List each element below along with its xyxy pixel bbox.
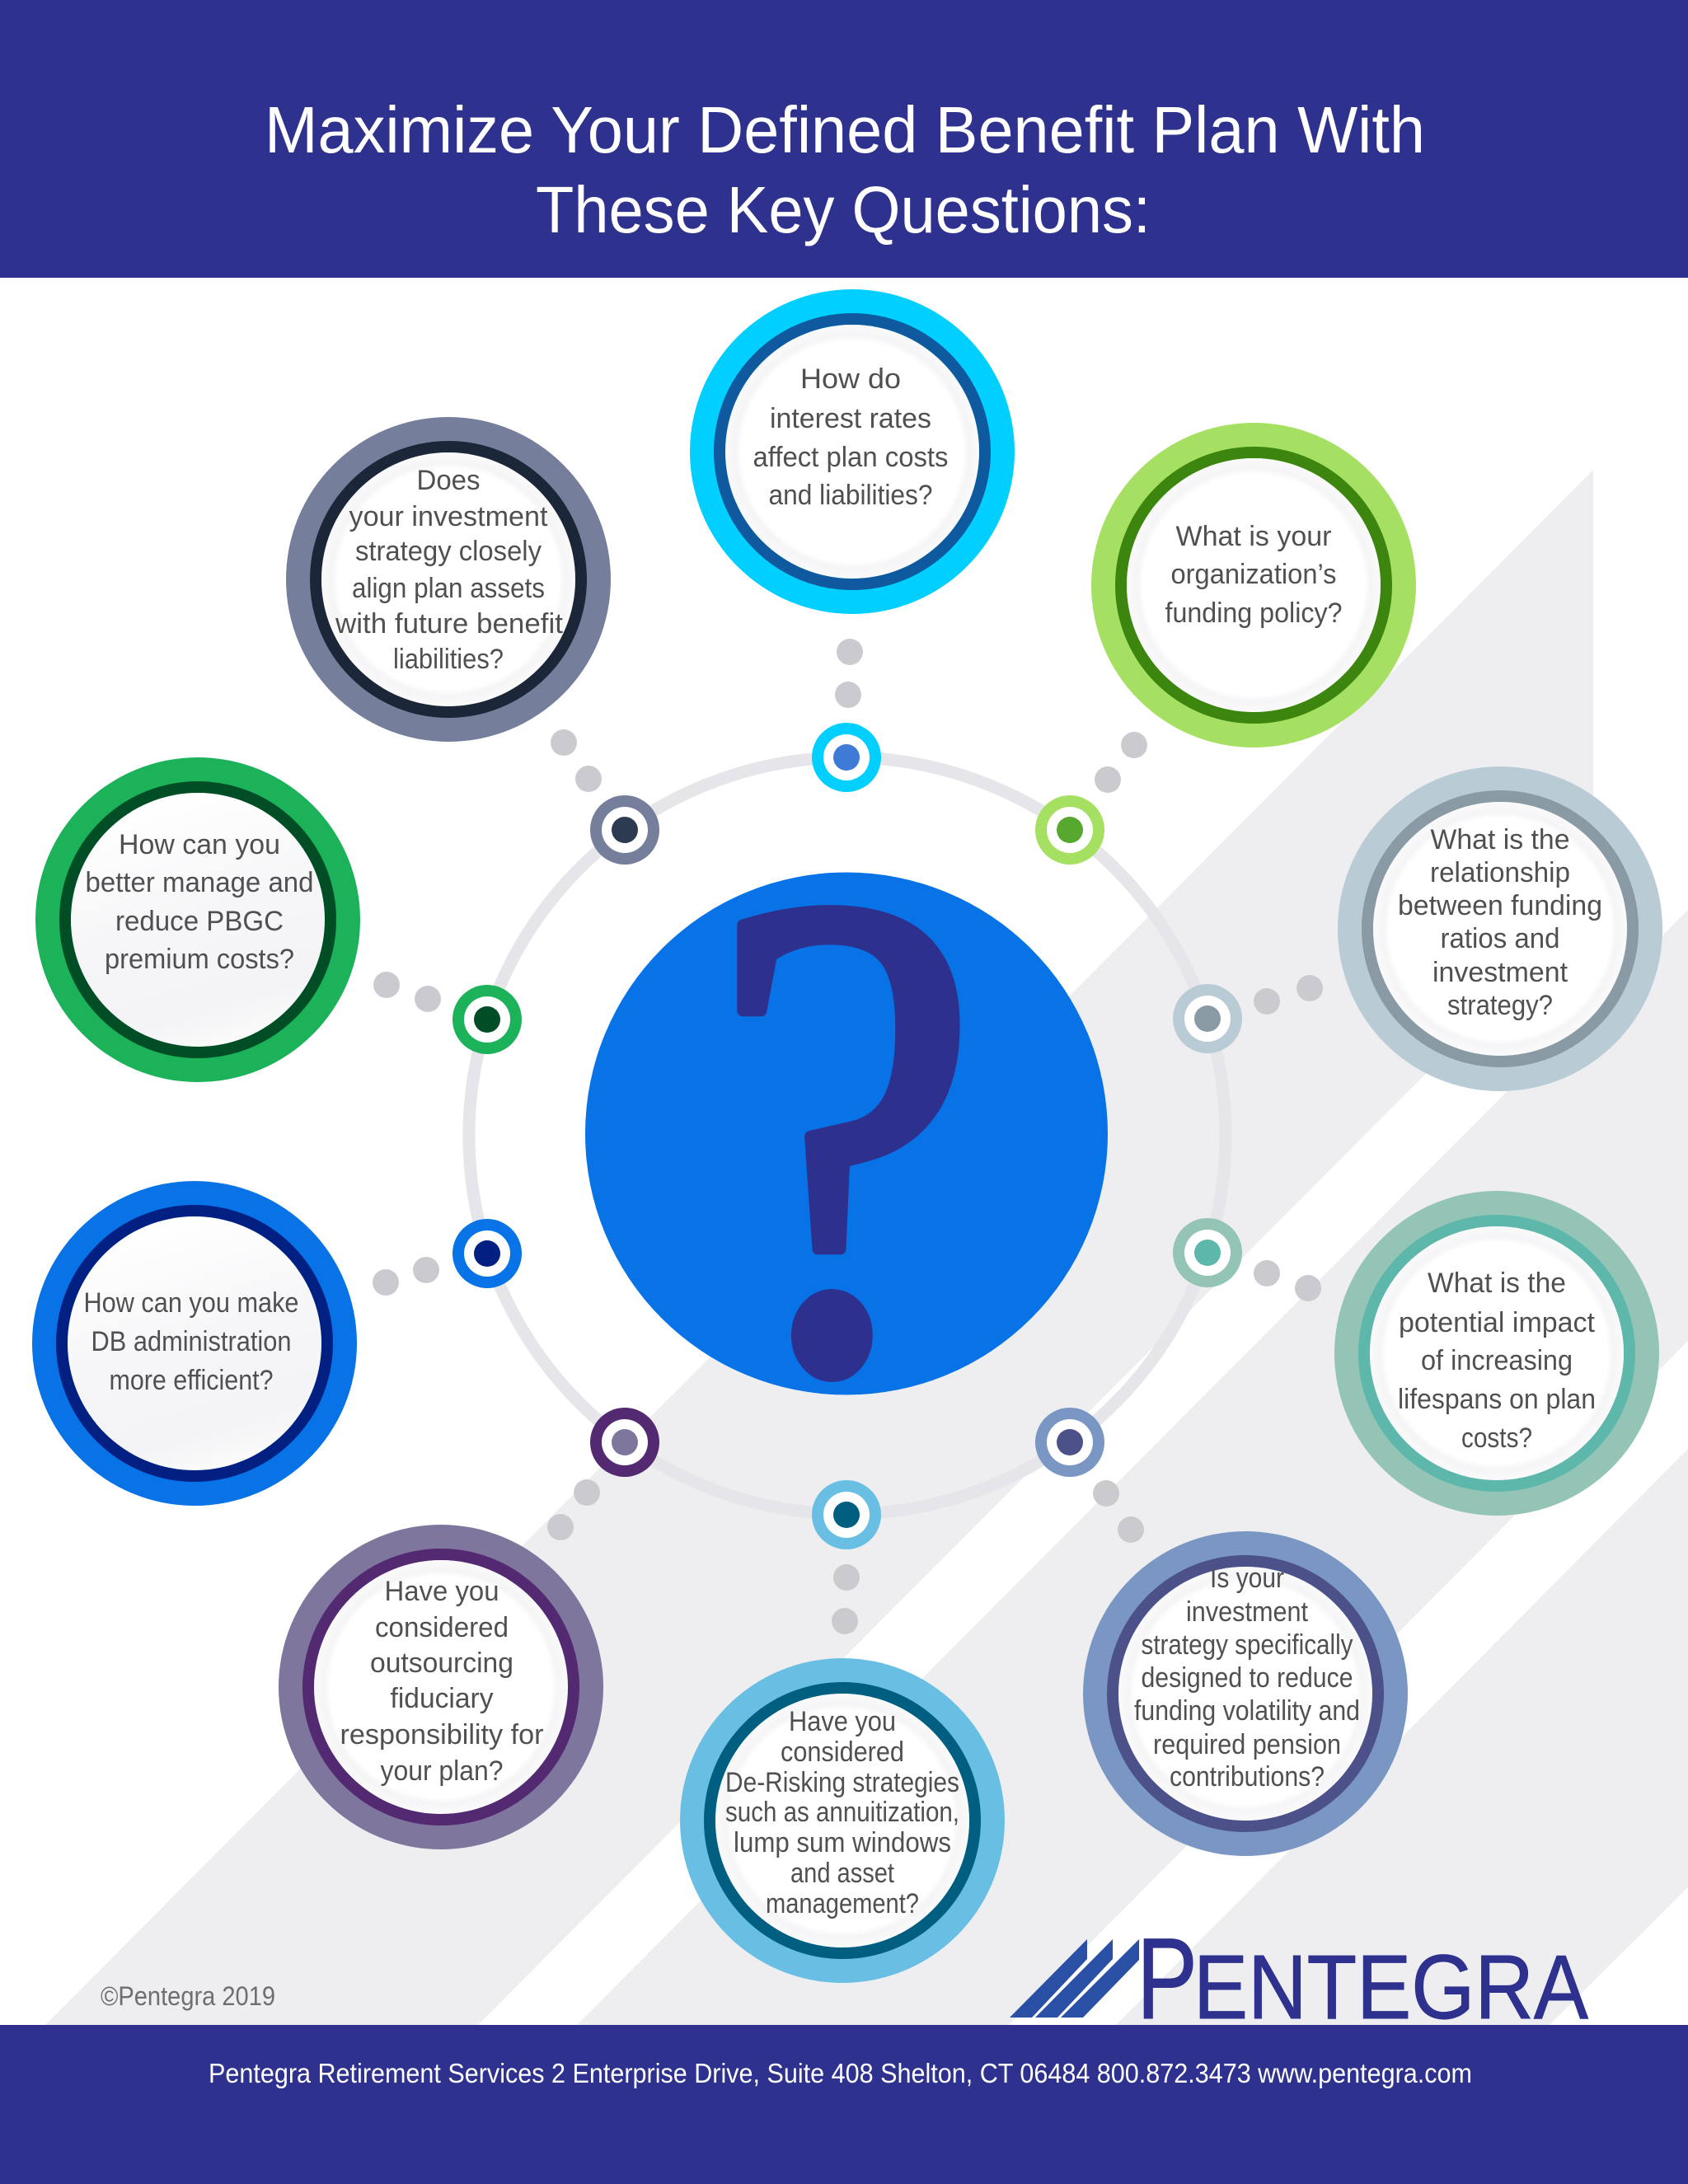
- panel: de-risking question: [680, 1658, 1005, 1983]
- text: interest rates question: [753, 363, 948, 511]
- logo wordmark: [1137, 1914, 1589, 2043]
- connector: asset alignment: [551, 729, 659, 865]
- panel: DB administration question: [32, 1181, 357, 1506]
- text: funding ratios question: between funding: [1398, 890, 1602, 921]
- connector: DB administration: [373, 1219, 522, 1296]
- text: DB administration question: more efficient?: [109, 1365, 274, 1396]
- title: These Key Questions:: [536, 173, 1151, 246]
- text: outsourcing fiduciary question: [340, 1576, 544, 1787]
- footer contact text: Pentegra Retirement Services 2 Enterprise Drive, Suite 408 Shelton, CT 06484 800.872.3473 www.pentegra.com: [209, 2058, 1472, 2088]
- text: DB administration question: DB administration: [91, 1326, 292, 1357]
- text: asset alignment question: liabilities?: [393, 644, 504, 675]
- footer banner: [0, 2025, 1688, 2184]
- text: funding ratios question: [1398, 824, 1602, 1021]
- central orbit ring: [469, 757, 1226, 1514]
- text: outsourcing fiduciary question: responsibility for: [340, 1719, 544, 1750]
- text: asset alignment question: [335, 465, 564, 675]
- text: funding volatility question: funding volatility and: [1134, 1695, 1360, 1727]
- text: funding ratios question: investment: [1432, 957, 1568, 988]
- text: outsourcing fiduciary question: Have you: [384, 1576, 499, 1607]
- text: de-risking question: lump sum windows: [734, 1827, 951, 1858]
- text: outsourcing fiduciary question: outsourcing: [370, 1647, 513, 1679]
- text: funding volatility question: designed to reduce: [1141, 1662, 1353, 1694]
- text: interest rates question: How do: [800, 363, 901, 395]
- text: lifespans question: potential impact: [1399, 1307, 1596, 1338]
- panel: funding policy question: [1091, 423, 1416, 748]
- text: funding ratios question: relationship: [1430, 857, 1570, 888]
- title: [265, 93, 1425, 246]
- connector: lifespans: [1173, 1218, 1321, 1301]
- text: interest rates question: interest rates: [770, 403, 931, 434]
- connector: funding policy: [1035, 732, 1147, 865]
- text: lifespans question: lifespans on plan: [1398, 1384, 1596, 1415]
- text: PBGC premium question: [86, 829, 313, 975]
- text: funding volatility question: [1134, 1563, 1360, 1793]
- connector: de-risking: [812, 1480, 881, 1634]
- panel: asset alignment question: [286, 417, 611, 742]
- text: asset alignment question: align plan assets: [352, 573, 545, 604]
- panel: lifespans question: [1334, 1191, 1659, 1516]
- text: de-risking question: and asset: [790, 1858, 894, 1889]
- logo wordmark: ENTEGRA: [1193, 1937, 1589, 2038]
- text: PBGC premium question: premium costs?: [105, 944, 294, 975]
- text: outsourcing fiduciary question: fiduciary: [391, 1683, 493, 1714]
- copyright note: ©Pentegra 2019: [101, 1981, 275, 2011]
- connector: funding ratios: [1173, 975, 1323, 1053]
- icon: question mark: ?: [710, 754, 980, 1516]
- panel: outsourcing fiduciary question: [279, 1525, 603, 1849]
- central question mark circle: [585, 754, 1108, 1516]
- text: de-risking question: De-Risking strategies: [725, 1767, 959, 1798]
- text: lifespans question: [1398, 1268, 1596, 1454]
- connector: PBGC premium: [373, 972, 522, 1054]
- text: funding volatility question: strategy specifically: [1141, 1629, 1353, 1661]
- logo wordmark: P: [1137, 1914, 1198, 2043]
- text: DB administration question: How can you make: [84, 1287, 298, 1319]
- panel: PBGC premium question: [35, 757, 360, 1082]
- text: funding volatility question: contributions?: [1170, 1761, 1325, 1793]
- connector: interest rates: [812, 639, 881, 792]
- text: de-risking question: considered: [781, 1736, 904, 1768]
- text: funding policy question: What is your: [1175, 521, 1332, 552]
- panel: funding volatility question: [1083, 1531, 1408, 1856]
- text: interest rates question: and liabilities?: [768, 480, 933, 511]
- text: de-risking question: such as annuitization,: [725, 1797, 959, 1828]
- connector: funding volatility: [1035, 1408, 1144, 1543]
- text: outsourcing fiduciary question: considered: [375, 1612, 509, 1643]
- text: funding policy question: funding policy?: [1165, 598, 1342, 629]
- text: PBGC premium question: reduce PBGC: [115, 906, 284, 937]
- text: funding volatility question: investment: [1186, 1596, 1308, 1628]
- text: de-risking question: management?: [766, 1888, 919, 1919]
- text: funding volatility question: Is your: [1210, 1563, 1284, 1594]
- text: asset alignment question: with future benefit: [335, 608, 564, 640]
- text: asset alignment question: your investment: [349, 501, 548, 532]
- text: de-risking question: [725, 1706, 959, 1919]
- text: outsourcing fiduciary question: your plan?: [381, 1755, 503, 1787]
- text: de-risking question: Have you: [789, 1706, 896, 1737]
- text: funding policy question: organization’s: [1170, 559, 1337, 590]
- text: PBGC premium question: better manage and: [86, 867, 313, 898]
- header banner: [0, 0, 1688, 278]
- connector: outsourcing fiduciary: [547, 1408, 659, 1540]
- text: lifespans question: costs?: [1461, 1422, 1532, 1454]
- text: funding ratios question: What is the: [1431, 824, 1569, 855]
- panel: interest rates question: [690, 289, 1015, 614]
- text: DB administration question: [84, 1287, 298, 1396]
- icon: logo stripes: [1010, 1939, 1139, 2018]
- text: lifespans question: What is the: [1428, 1268, 1566, 1299]
- logo: Pentegra: [1010, 1914, 1589, 2043]
- text: asset alignment question: strategy closely: [355, 536, 542, 567]
- text: PBGC premium question: How can you: [119, 829, 280, 860]
- text: asset alignment question: Does: [417, 465, 480, 496]
- text: interest rates question: affect plan costs: [753, 442, 948, 473]
- panel: funding ratios question: [1338, 766, 1662, 1091]
- text: funding volatility question: required pension: [1153, 1729, 1341, 1760]
- text: funding ratios question: strategy?: [1447, 990, 1553, 1021]
- title: Maximize Your Defined Benefit Plan With: [265, 93, 1425, 166]
- text: funding policy question: [1165, 521, 1342, 629]
- text: funding ratios question: ratios and: [1441, 923, 1559, 954]
- text: lifespans question: of increasing: [1421, 1345, 1573, 1376]
